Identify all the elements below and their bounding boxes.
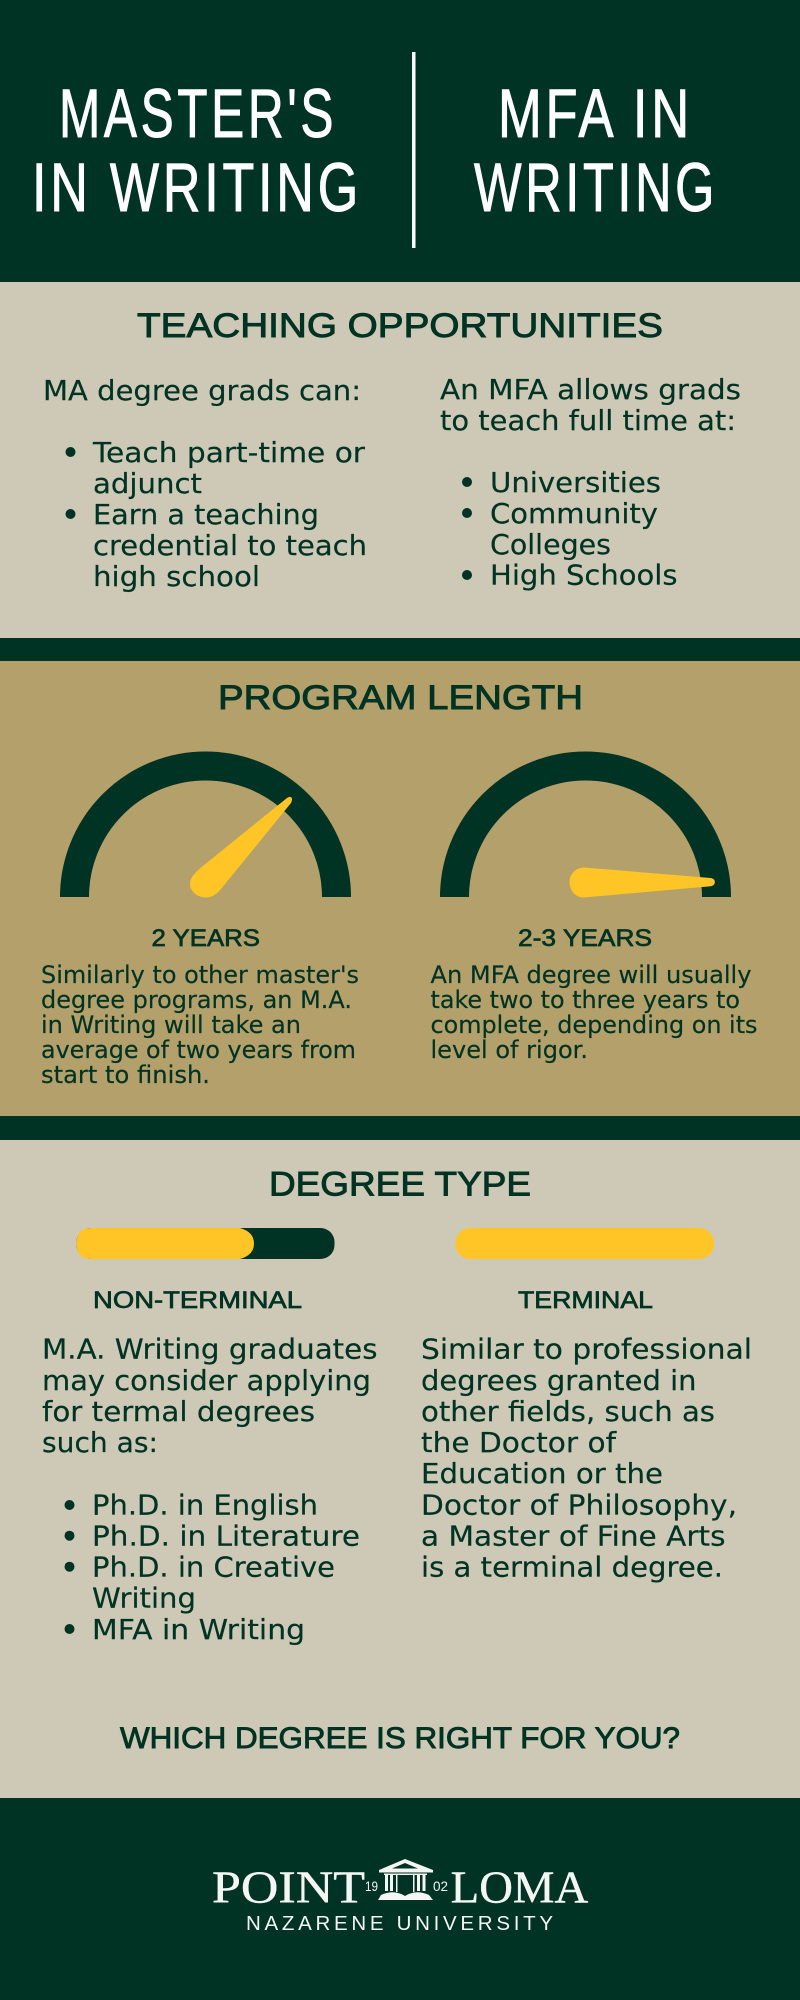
panel: program length xyxy=(0,661,800,1116)
text block: MA length: degree programs, an M.A. xyxy=(41,986,352,1014)
heading: degree type: DEGREE TYPE xyxy=(269,1166,531,1204)
text block: MFA degree type: other fields, such as xyxy=(421,1395,715,1428)
text block: MFA degree type: Education or the xyxy=(421,1457,663,1490)
text block: MA teaching: adjunct xyxy=(93,467,202,500)
heading: teaching opportunities: TEACHING OPPORTUNITIES xyxy=(137,307,663,345)
title: master's in writing: MASTER'S xyxy=(59,75,337,152)
footer panel xyxy=(0,1798,800,2000)
text block: MA degree type: may consider applying xyxy=(42,1364,371,1397)
text block: MFA length xyxy=(430,961,758,1064)
text block: MA degree type: such as: xyxy=(42,1426,158,1459)
label: terminal: TERMINAL xyxy=(518,1287,653,1314)
text block: MFA teaching: Universities xyxy=(490,466,661,499)
text block: MA teaching: MA degree grads can: xyxy=(43,374,361,407)
text block: MA degree type: Writing xyxy=(92,1582,196,1615)
bar: terminal xyxy=(456,1228,714,1259)
title: mfa in writing xyxy=(474,75,718,226)
text block: MFA degree type: the Doctor of xyxy=(421,1426,617,1459)
logo: point loma nazarene university: NAZARENE UNIVERSITY xyxy=(246,1912,553,1935)
text block: MFA teaching xyxy=(440,373,741,592)
text block: MFA teaching: to teach full time at: xyxy=(440,404,736,437)
title: mfa in writing: WRITING xyxy=(474,149,718,226)
text block: MA length: average of two years from xyxy=(41,1036,356,1064)
text block: MA teaching: high school xyxy=(93,560,260,593)
text block: MA length: Similarly to other master's xyxy=(41,961,359,989)
text block: MA teaching: credential to teach xyxy=(93,529,367,562)
text block: MFA degree type: degrees granted in xyxy=(421,1364,696,1397)
text block: MA degree type xyxy=(42,1333,378,1646)
panel: teaching opportunities xyxy=(0,282,800,638)
text block: MA length: in Writing will take an xyxy=(41,1011,301,1039)
text block: MFA teaching: Colleges xyxy=(490,528,611,561)
text block: MFA length: complete, depending on its xyxy=(430,1011,758,1039)
text block: MA degree type: MFA in Writing xyxy=(92,1613,305,1646)
text block: MFA length: An MFA degree will usually xyxy=(430,961,752,989)
logo: point loma nazarene university xyxy=(212,1859,589,1935)
text block: MA degree type: Ph.D. in Creative xyxy=(92,1551,335,1584)
text block: MA teaching: Earn a teaching xyxy=(93,498,319,531)
gauge: 2 years xyxy=(74,766,336,898)
panel: degree type xyxy=(0,1140,800,1798)
text block: MFA teaching: An MFA allows grads xyxy=(440,373,741,406)
text block: MFA degree type: is a terminal degree. xyxy=(421,1551,723,1584)
text block: MA teaching xyxy=(43,374,367,593)
text block: MA length: start to finish. xyxy=(41,1061,210,1089)
text block: MA length xyxy=(41,961,359,1089)
text block: MFA degree type: a Master of Fine Arts xyxy=(421,1520,726,1553)
heading: which degree is right for you: WHICH DEGREE IS RIGHT FOR YOU? xyxy=(120,1722,680,1755)
text block: MFA length: take two to three years to xyxy=(430,986,740,1014)
text block: MFA teaching: High Schools xyxy=(490,558,678,592)
icon: building with open book xyxy=(378,1859,433,1900)
gauge: 2-3 years xyxy=(454,766,716,898)
text block: MA degree type: M.A. Writing graduates xyxy=(42,1333,378,1366)
label: 2-3 years: 2-3 YEARS xyxy=(518,925,652,952)
label: non-terminal: NON-TERMINAL xyxy=(93,1287,302,1314)
text block: MA degree type: Ph.D. in English xyxy=(92,1489,318,1522)
text block: MA teaching: Teach part-time or xyxy=(92,436,366,469)
title: master's in writing xyxy=(32,75,362,226)
title: mfa in writing: MFA IN xyxy=(498,75,693,152)
text block: MFA degree type xyxy=(421,1333,752,1584)
label: 2 years: 2 YEARS xyxy=(152,925,260,952)
text block: MFA length: level of rigor. xyxy=(430,1036,588,1064)
text block: MFA degree type: Doctor of Philosophy, xyxy=(421,1489,737,1522)
title: master's in writing: IN WRITING xyxy=(32,149,362,226)
logo: point loma nazarene university: LOMA xyxy=(451,1863,589,1913)
text block: MFA teaching: Community xyxy=(490,497,658,530)
header panel xyxy=(0,0,800,282)
logo: point loma nazarene university: 02 xyxy=(433,1878,448,1894)
logo: point loma nazarene university: 19 xyxy=(365,1878,378,1894)
logo: point loma nazarene university: POINT xyxy=(212,1863,365,1913)
bar: non-terminal xyxy=(76,1228,334,1259)
text block: MFA degree type: Similar to professional xyxy=(421,1333,752,1366)
text block: MA degree type: Ph.D. in Literature xyxy=(92,1520,360,1553)
heading: program length: PROGRAM LENGTH xyxy=(218,679,583,717)
text block: MA degree type: for termal degrees xyxy=(42,1395,315,1428)
